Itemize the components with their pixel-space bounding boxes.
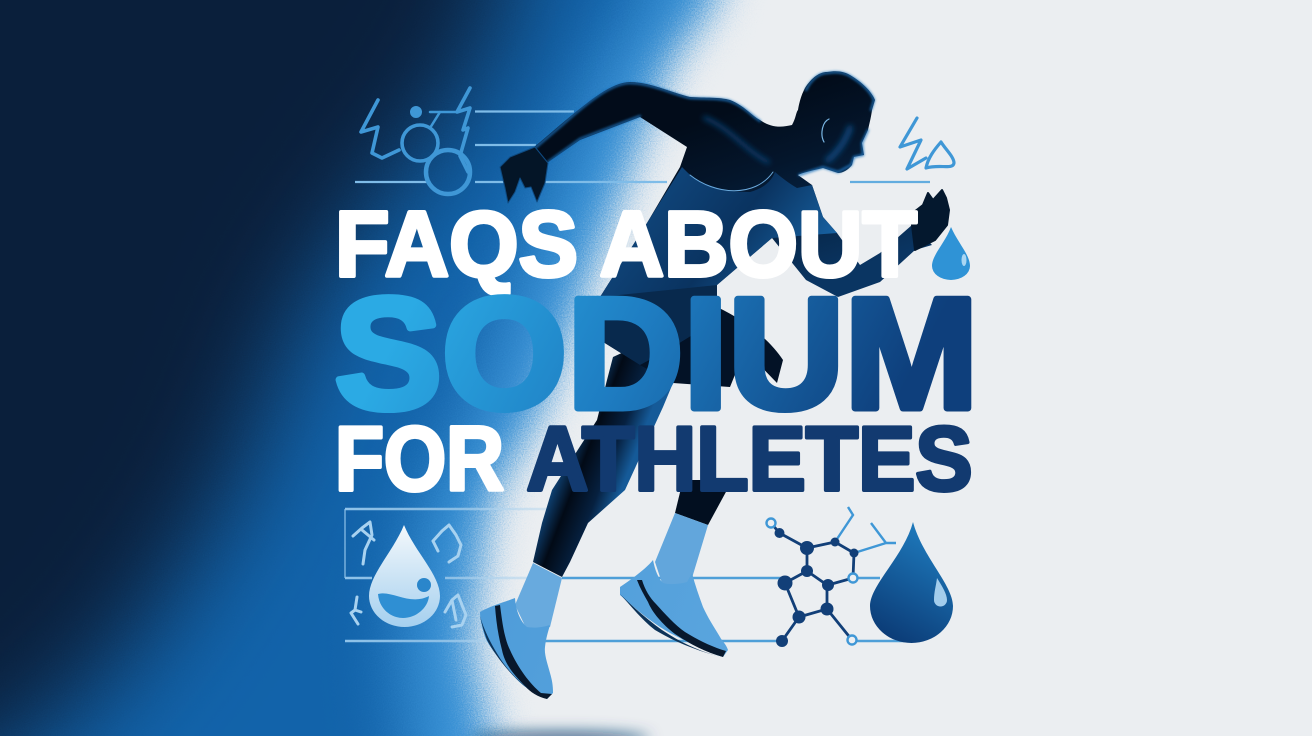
title line 3 white: FOR	[335, 409, 504, 510]
front shin	[675, 480, 729, 525]
runner silhouette	[480, 71, 949, 699]
rear sock	[515, 563, 562, 630]
rear shoe	[480, 598, 553, 699]
water inside drop	[378, 593, 429, 618]
title: FAQs About Sodium for Athletes	[334, 192, 978, 510]
icon: water drop near hand	[932, 227, 970, 280]
bubble	[417, 578, 431, 592]
horizontal guide lines	[345, 112, 930, 641]
right hand	[912, 190, 949, 250]
icon: large pale water drop panel, lower left	[351, 522, 466, 627]
icon: lightning and drop outline, top right	[900, 118, 954, 169]
left hand	[500, 147, 548, 203]
molecule diagram	[766, 507, 896, 647]
shorts	[600, 281, 717, 365]
icon: large dark water drop, lower right	[870, 522, 953, 643]
body rim light	[535, 72, 874, 191]
title line 1: FAQS ABOUT	[335, 192, 917, 296]
title line 2: SODIUM	[334, 266, 978, 442]
rear leg	[533, 340, 673, 577]
front sock	[655, 513, 708, 586]
front thigh	[600, 288, 783, 387]
tank top	[600, 167, 837, 297]
front shoe	[620, 560, 728, 657]
icon: lightning bolts and circles, top left	[361, 88, 470, 194]
scribble icons	[351, 522, 466, 627]
upper body, arm and head	[533, 71, 932, 297]
title line 3 navy: ATHLETES	[526, 409, 972, 510]
pale drop	[369, 525, 440, 627]
